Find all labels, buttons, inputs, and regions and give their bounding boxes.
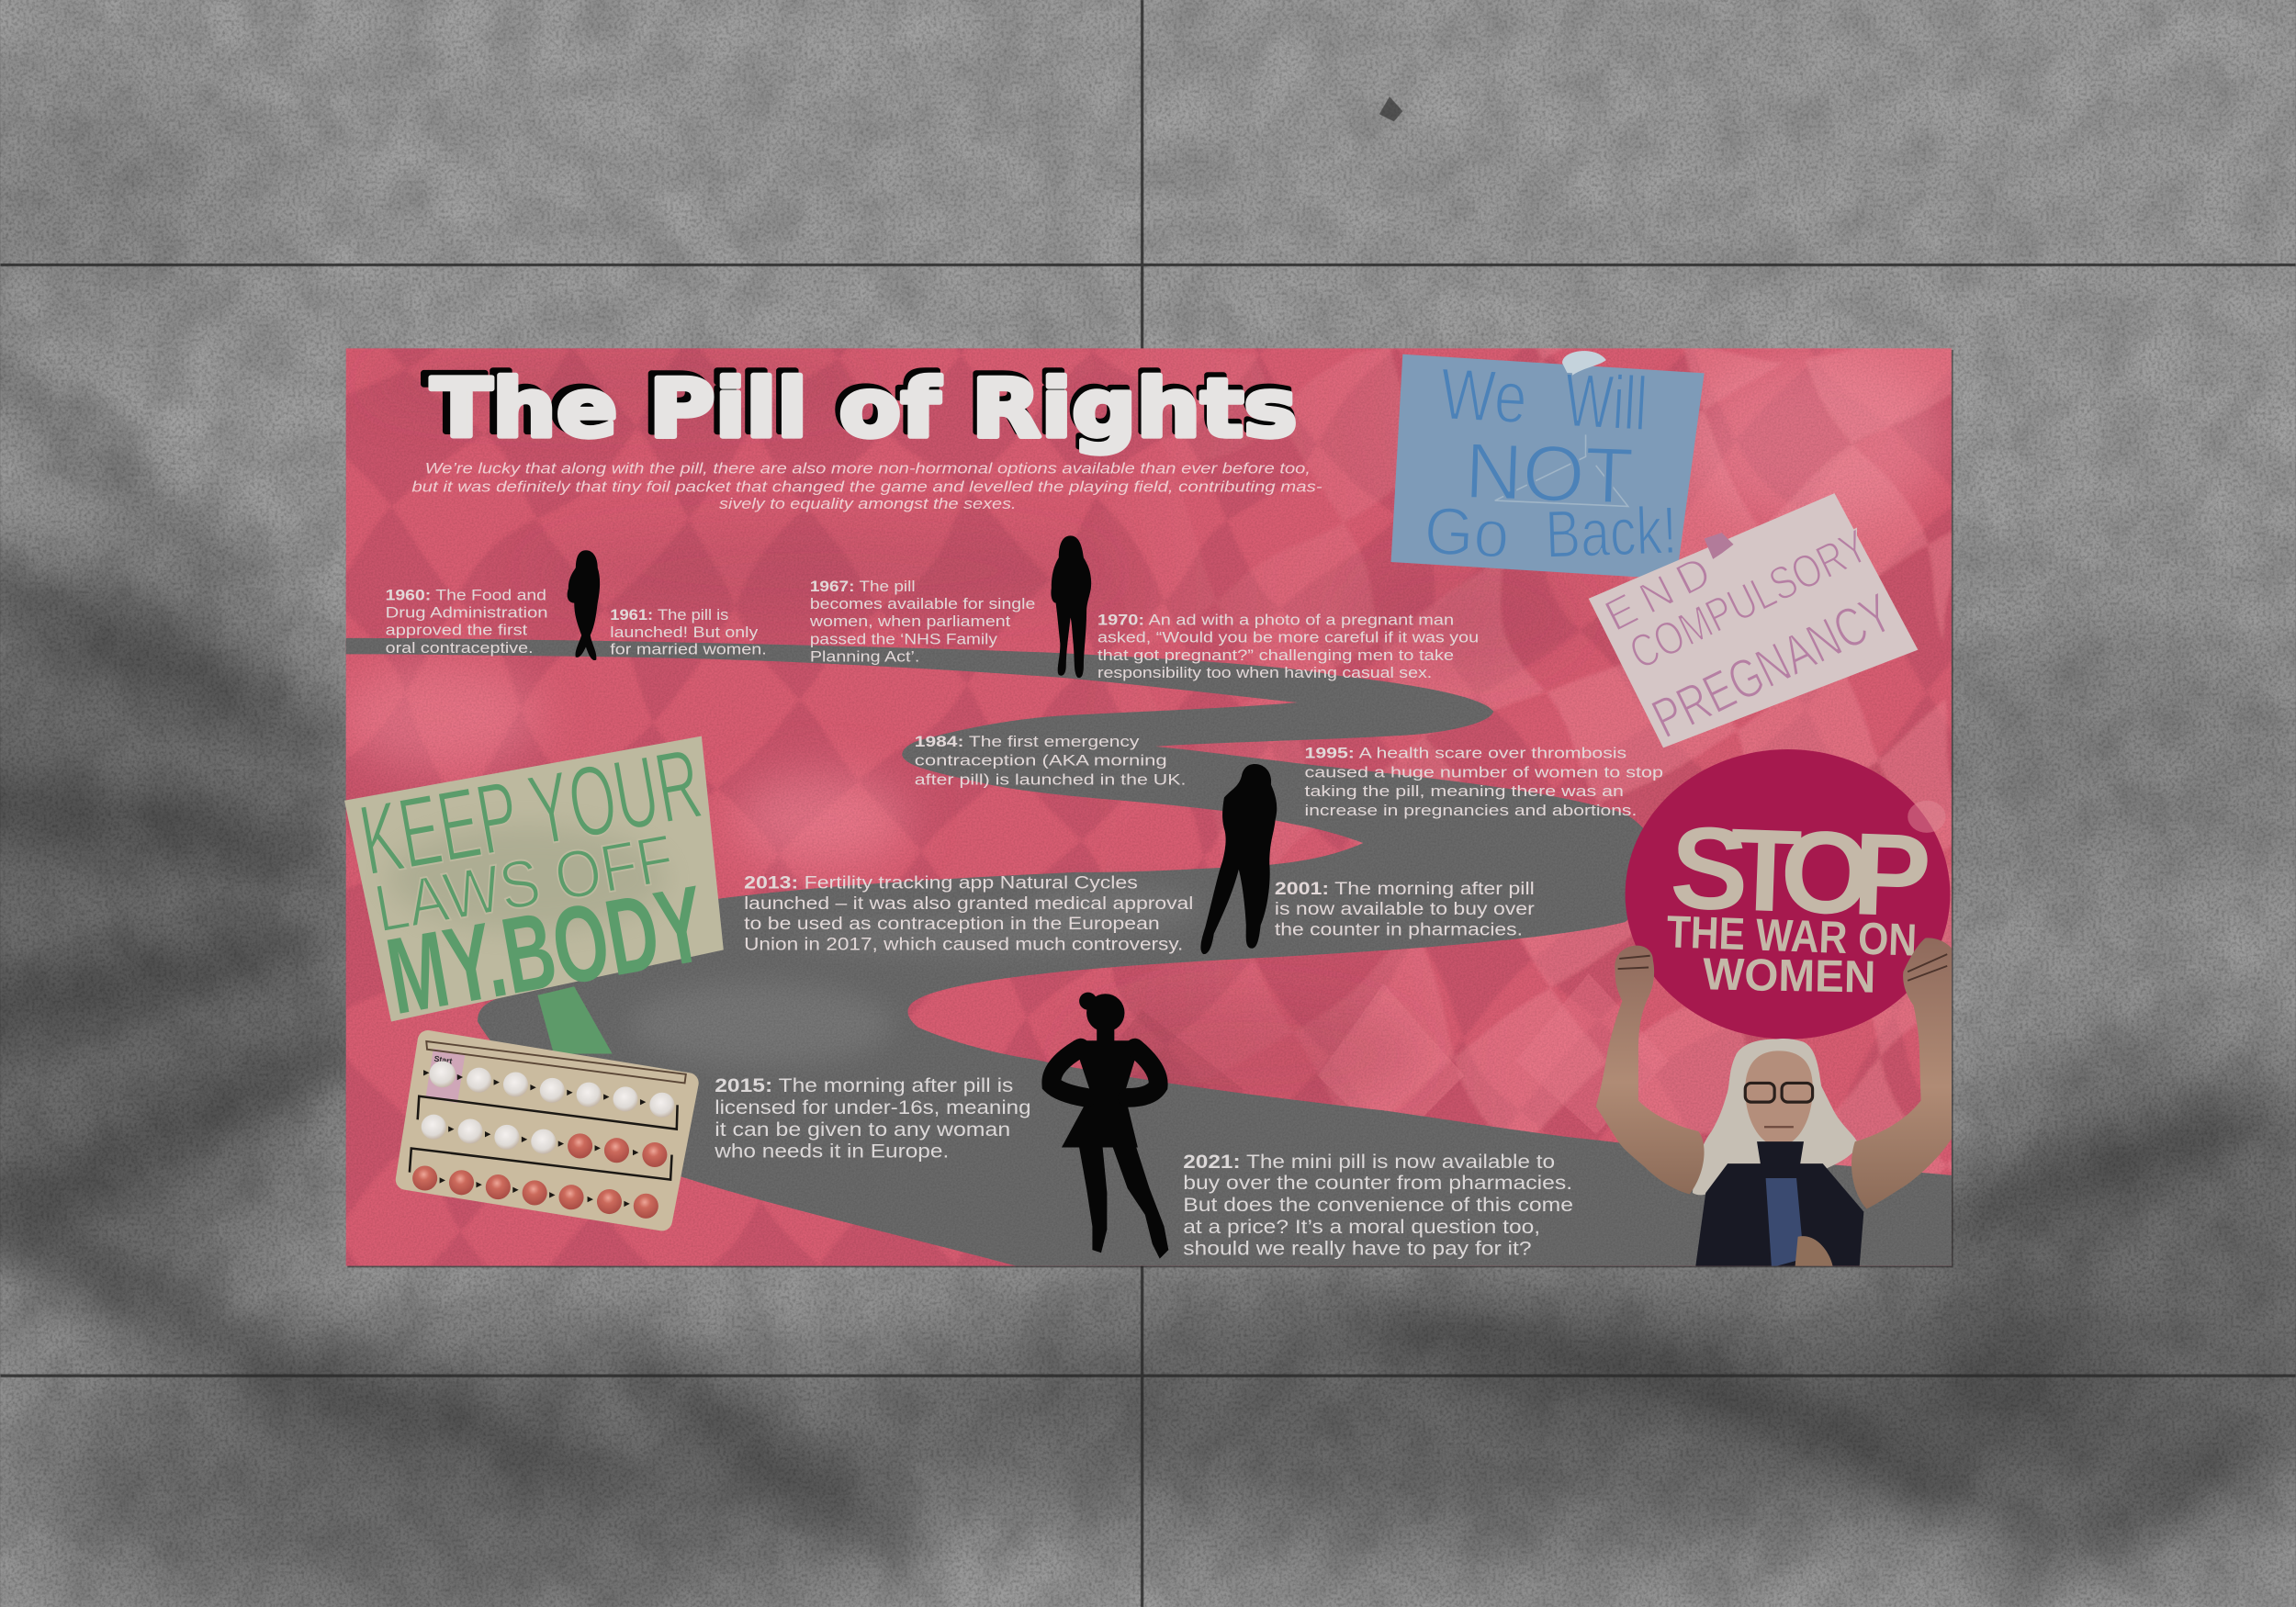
timeline entry 1995: 1995: A health scare over thrombosis: [1305, 745, 1626, 762]
intro text: but it was definitely that tiny foil packet that changed the game and levelled the playing field, contributing mas-: [411, 478, 1322, 496]
timeline entry 1970: responsibility too when having casual sex.: [1097, 664, 1432, 681]
timeline entry 1960: [386, 586, 548, 657]
pill packet: [406, 1040, 689, 1220]
sign: keep your laws off my body: KEEP YOUR: [352, 727, 709, 896]
winding road: [346, 638, 1952, 1266]
timeline entry 1984: contraception (AKA morning: [915, 752, 1167, 770]
timeline entry 2013: 2013: Fertility tracking app Natural Cycles: [744, 873, 1138, 893]
silhouette: woman 1961: [568, 550, 600, 660]
timeline entry 2001: is now available to buy over: [1275, 900, 1536, 919]
timeline entry 1967: becomes available for single: [810, 595, 1035, 612]
sign: we will not go back: Will: [1563, 357, 1649, 446]
timeline entry 2021: 2021: The mini pill is now available to: [1183, 1151, 1555, 1173]
timeline entry 2021: buy over the counter from pharmacies.: [1183, 1172, 1572, 1194]
timeline entry 2015: [714, 1074, 1030, 1163]
stop sign: WOMEN: [1703, 949, 1876, 1003]
timeline entry 2013: Union in 2017, which caused much controversy.: [744, 935, 1183, 954]
timeline entry 1995: caused a huge number of women to stop: [1305, 763, 1663, 781]
timeline entry 1970: asked, “Would you be more careful if it was you: [1097, 629, 1479, 646]
stop sign: THE WAR ON: [1666, 906, 1918, 966]
timeline entry 1984: [915, 733, 1186, 788]
timeline entry 1970: [1097, 612, 1479, 681]
timeline entry 2013: to be used as contraception in the European: [744, 915, 1160, 934]
timeline entry 1970: 1970: An ad with a photo of a pregnant man: [1097, 612, 1454, 629]
sign: we will not go back: Go: [1423, 493, 1511, 572]
timeline entry 1995: [1305, 745, 1663, 819]
sign: we will not go back: Back!: [1544, 492, 1678, 572]
sign: we will not go back: [1391, 351, 1705, 579]
silhouette: woman 1967: [1051, 535, 1091, 678]
timeline entry 2001: [1275, 880, 1536, 939]
timeline entry 1961: launched! But only: [610, 624, 759, 641]
poster: [344, 348, 1953, 1267]
timeline entry 2021: should we really have to pay for it?: [1183, 1238, 1532, 1260]
timeline entry 1961: for married women.: [610, 640, 767, 657]
timeline entry 1967: Planning Act’.: [810, 647, 919, 665]
sign: end compulsory pregnancy: END: [1597, 547, 1718, 641]
timeline entry 2021: [1183, 1151, 1573, 1260]
red pills: [412, 1133, 667, 1219]
stop sign: [1626, 749, 1950, 1039]
timeline entry 2021: at a price? It’s a moral question too,: [1183, 1216, 1540, 1238]
start tag: [425, 1049, 466, 1103]
intro text: sively to equality amongst the sexes.: [719, 495, 1017, 512]
timeline entry 2013: [744, 873, 1193, 954]
sign: keep your laws off my body: LAWS OFF: [369, 820, 679, 947]
timeline entry 2021: But does the convenience of this come: [1183, 1194, 1573, 1216]
sign: keep your laws off my body: MY.BODY: [378, 862, 714, 1037]
timeline entry 1960: Drug Administration: [386, 604, 548, 622]
sign: keep your laws off my body: [344, 727, 724, 1054]
stop sign: STOP: [1668, 803, 1933, 942]
sign: end compulsory pregnancy: [1589, 493, 1918, 750]
timeline entry 2001: the counter in pharmacies.: [1275, 920, 1523, 939]
timeline entry 1995: increase in pregnancies and abortions.: [1305, 802, 1637, 819]
timeline entry 2015: it can be given to any woman: [715, 1118, 1010, 1141]
woman face: [1745, 1051, 1813, 1146]
timeline entry 2015: licensed for under-16s, meaning: [715, 1096, 1030, 1118]
sign: end compulsory pregnancy: PREGNANCY: [1643, 580, 1901, 750]
timeline entry 1960: approved the first: [386, 622, 528, 639]
woman arms: [1596, 938, 1952, 1208]
icon: hand holding sign: [1562, 351, 1606, 377]
timeline entry 1984: 1984: The first emergency: [915, 733, 1140, 750]
paper folds and grain: [346, 348, 1952, 1266]
protester holding sign: [1596, 749, 1952, 1267]
title: The Pill of Rights: [423, 357, 1296, 451]
timeline entry 2013: launched – it was also granted medical approval: [744, 894, 1193, 914]
woman body: [1695, 1163, 1863, 1267]
sign: end compulsory pregnancy: COMPULSORY: [1621, 520, 1875, 680]
timeline entry 2015: who needs it in Europe.: [714, 1141, 949, 1163]
timeline entry 2001: 2001: The morning after pill: [1275, 880, 1535, 899]
timeline entry 1995: taking the pill, meaning there was an: [1305, 782, 1624, 800]
timeline entry 1961: 1961: The pill is: [610, 606, 728, 624]
poster diamond background: [345, 348, 1953, 1266]
start tag: Start: [433, 1054, 453, 1066]
title: The Pill of Rights: [431, 362, 1298, 455]
intro text: [411, 460, 1322, 512]
timeline entry 1967: women, when parliament: [809, 612, 1011, 630]
timeline entry 1967: 1967: The pill: [810, 578, 916, 595]
timeline entry 1970: that got pregnant?” challenging men to take: [1097, 646, 1454, 664]
white pills: [422, 1062, 674, 1154]
timeline entry 1984: after pill) is launched in the UK.: [915, 770, 1186, 788]
intro text: We’re lucky that along with the pill, there are also more non-hormonal options available than ever before too,: [425, 460, 1311, 478]
timeline entry 1967: [809, 578, 1035, 665]
silhouette: woman 2015-2021: [1052, 993, 1168, 1259]
icon: purple pin: [1705, 533, 1734, 559]
timeline entry 1967: passed the ‘NHS Family: [810, 630, 998, 647]
sign: we will not go back: We: [1438, 353, 1529, 439]
sign: we will not go back: NOT: [1464, 427, 1635, 521]
hanger outline: [1495, 434, 1628, 506]
timeline entry 1960: oral contraceptive.: [386, 639, 534, 657]
timeline entry 2015: 2015: The morning after pill is: [715, 1074, 1013, 1096]
timeline entry 1960: 1960: The Food and: [386, 586, 546, 603]
silhouette: woman 1995-2001: [1200, 764, 1277, 954]
woman hair: [1693, 1039, 1858, 1195]
timeline entry 1961: [610, 606, 767, 657]
